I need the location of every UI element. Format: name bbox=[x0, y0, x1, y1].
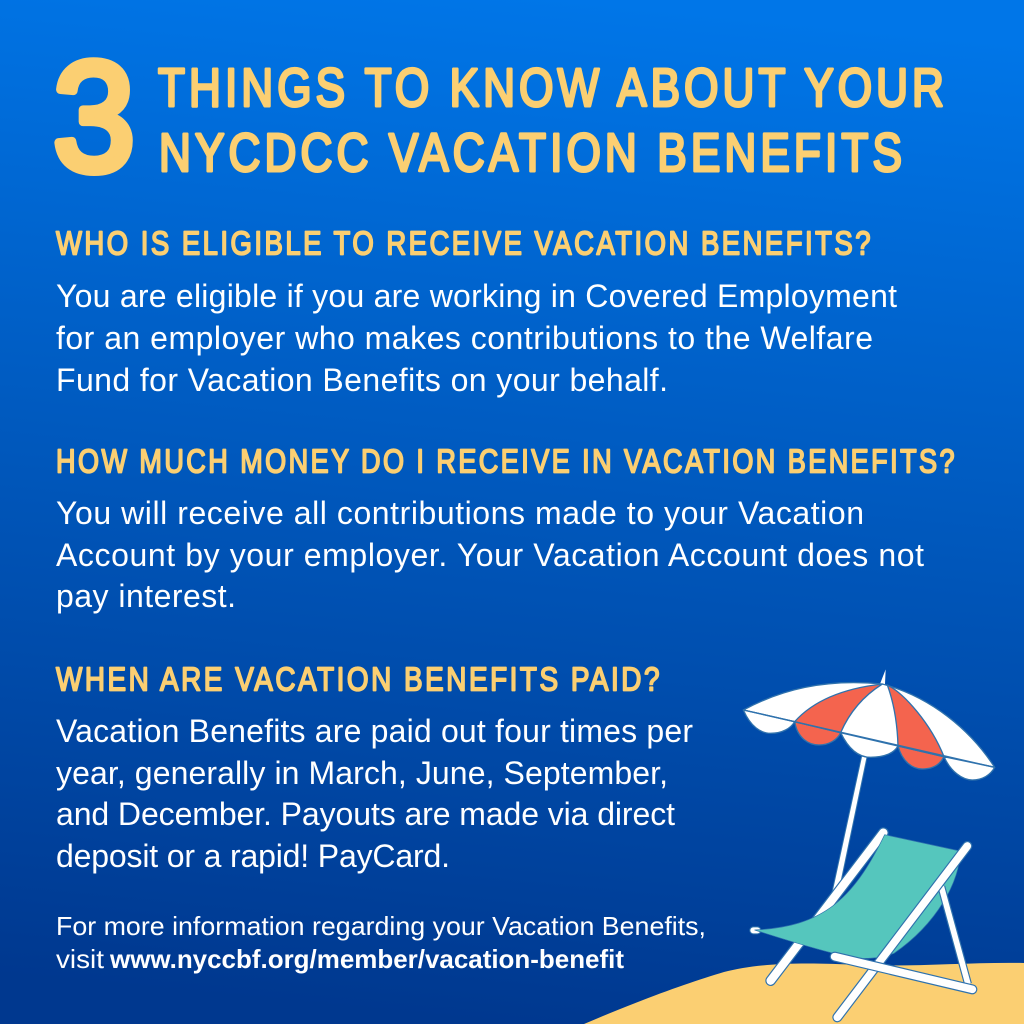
section: eligibility bbox=[56, 224, 897, 398]
title bbox=[53, 30, 948, 203]
section: timing bbox=[56, 660, 693, 874]
website link: www.nyccbf.org/member/vacation-benefit bbox=[109, 944, 624, 974]
body: eligibility: for an employer who makes contributions to the Welfare bbox=[56, 320, 873, 356]
body: amount bbox=[56, 495, 924, 614]
body: amount: Account by your employer. Your Vacation Account does not bbox=[56, 537, 924, 573]
heading: eligibility: WHO IS ELIGIBLE TO RECEIVE VACATION BENEFITS? bbox=[56, 224, 873, 262]
body: timing: deposit or a rapid! PayCard. bbox=[56, 838, 450, 874]
footer note bbox=[56, 911, 706, 974]
footer note: visit bbox=[56, 944, 105, 974]
body: eligibility bbox=[56, 278, 897, 398]
section: amount bbox=[56, 442, 957, 614]
body: timing: and December. Payouts are made via direct bbox=[56, 796, 675, 832]
back leg bbox=[771, 833, 883, 981]
body: timing: year, generally in March, June, September, bbox=[56, 755, 668, 791]
front leg bbox=[837, 846, 967, 1017]
canopy bbox=[743, 683, 995, 780]
icon: deck chair bbox=[753, 833, 972, 1017]
body: amount: pay interest. bbox=[56, 578, 236, 614]
umbrella pole bbox=[832, 756, 867, 892]
icon: beach umbrella bbox=[743, 669, 995, 892]
crossbar bbox=[835, 957, 972, 989]
footer note: For more information regarding your Vacation Benefits, bbox=[56, 911, 706, 941]
umbrella tip bbox=[880, 669, 886, 684]
big number 3: 3 bbox=[53, 30, 135, 203]
sand bbox=[584, 963, 1024, 1024]
strut bbox=[941, 887, 968, 984]
body: eligibility: Fund for Vacation Benefits on your behalf. bbox=[56, 362, 668, 398]
body: eligibility: You are eligible if you are working in Covered Employment bbox=[56, 278, 897, 314]
seat fabric bbox=[755, 835, 960, 958]
body: timing bbox=[56, 713, 693, 874]
body: timing: Vacation Benefits are paid out four times per bbox=[56, 713, 693, 749]
body: amount: You will receive all contributions made to your Vacation bbox=[56, 495, 864, 531]
head stub bbox=[753, 918, 757, 942]
heading: timing: WHEN ARE VACATION BENEFITS PAID? bbox=[56, 660, 662, 698]
